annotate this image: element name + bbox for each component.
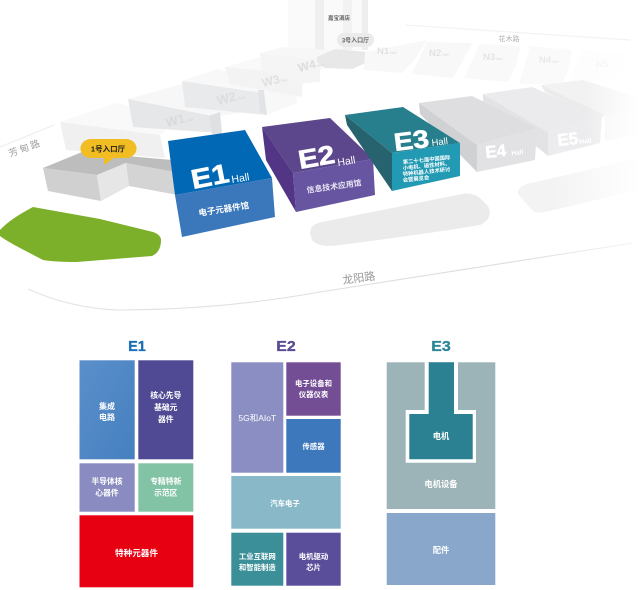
hall E2: E2 xyxy=(296,140,337,174)
hall E4 xyxy=(419,96,537,172)
hall N5 xyxy=(568,50,625,82)
hall N1: N1 Hall xyxy=(377,46,397,57)
E1: 半导体核心器件 xyxy=(80,463,135,512)
hall E3: 特种机器人技术研讨 xyxy=(402,165,451,178)
hall E5: E5Hall xyxy=(556,128,592,150)
hall N1 xyxy=(364,40,427,73)
hall E1: Hall xyxy=(231,171,250,186)
E1: 核心先导基础元器件: 基础元 xyxy=(154,402,178,412)
hotel tower: 嘉宝酒店 xyxy=(328,14,350,22)
E2: 电子设备和仪器仪表: 仪器仪表 xyxy=(299,390,329,399)
E1: 半导体核心器件: 半导体核 xyxy=(91,476,123,486)
E1: 半导体核心器件: 心器件 xyxy=(95,488,119,498)
E1: 专精特新示范区: 专精特新 xyxy=(150,476,182,486)
hall E3: 会暨展览会 xyxy=(402,173,430,184)
E1: 专精特新示范区 xyxy=(138,463,193,512)
E2: 工业互联网和智能制造 xyxy=(231,533,283,586)
hall N5: N5 xyxy=(596,59,609,70)
entrance 1 label: 1号入口厅 xyxy=(91,144,126,154)
hall E1 xyxy=(168,130,275,237)
hall W2: W2Hall xyxy=(215,87,246,108)
hall E3: 第二十七届中国国际 xyxy=(402,153,451,166)
E2: 汽车电子 xyxy=(231,476,341,529)
hall W1: W1Hall xyxy=(164,109,195,130)
road: 花木路 xyxy=(405,25,630,43)
heading E2: E2 xyxy=(276,339,296,355)
E2: 电机驱动芯片: 电机驱动 xyxy=(299,552,329,561)
road: 芳甸路 xyxy=(0,125,54,160)
entrance 1 building xyxy=(43,152,178,201)
hall N2 xyxy=(412,42,473,78)
hall E4: E4 Hall xyxy=(484,139,524,162)
right edge fade xyxy=(585,50,640,260)
hall E1: 电子元器件馆 xyxy=(198,200,250,218)
E2: 工业互联网和智能制造: 工业互联网 xyxy=(239,552,276,561)
E1: 集成电路: 电路 xyxy=(99,412,115,422)
E1: 核心先导基础元器件: 核心先导 xyxy=(150,390,182,400)
E2: 工业互联网和智能制造: 和智能制造 xyxy=(239,563,276,572)
hall W3: W3Hall xyxy=(260,70,289,90)
E1: 核心先导基础元器件 xyxy=(138,360,193,459)
hall E3: E3 xyxy=(392,125,431,157)
treemap E2 xyxy=(231,362,341,586)
hall E2: 信息技术应用馆 xyxy=(306,177,362,195)
road: 龙阳路 xyxy=(28,243,633,310)
E3: 电机 xyxy=(406,362,476,463)
hall N4 xyxy=(519,46,572,84)
E3: 电机设备 xyxy=(387,362,495,509)
hall N4: N4 Hall xyxy=(539,55,559,66)
hotel tower xyxy=(288,0,368,50)
hall W0 xyxy=(60,103,180,158)
E1: 集成电路 xyxy=(80,360,135,459)
E1: 特种元器件 xyxy=(80,515,193,587)
hall E3: 小电机、磁性材料、 xyxy=(402,159,451,172)
entrance 3 label: 3号入口厅 xyxy=(342,38,369,44)
E2: 5G和AIoT xyxy=(231,362,283,473)
pad: front of E1-E3 xyxy=(310,194,490,246)
hall E3: Hall xyxy=(431,136,449,149)
hall N3: N3 Hall xyxy=(483,52,503,63)
E2: 电机驱动芯片: 芯片 xyxy=(306,563,321,572)
E2: 电子设备和仪器仪表 xyxy=(286,362,341,416)
hall E2: Hall xyxy=(337,154,356,169)
hall E3 xyxy=(345,107,460,191)
hall N2: N2 Hall xyxy=(429,48,449,59)
road: 芳甸路: 芳甸路 xyxy=(7,137,43,160)
heading E3: E3 xyxy=(431,339,451,355)
entrance 3 label xyxy=(337,33,374,47)
E2: 5G和AIoT: 5G和AIoT xyxy=(238,413,276,423)
hall E1: E1 xyxy=(189,159,232,195)
treemap E1 xyxy=(80,360,193,587)
hall E6 xyxy=(541,80,640,141)
hall W4 xyxy=(260,47,368,84)
E3: 配件 xyxy=(387,513,495,585)
E2: 电子设备和仪器仪表: 电子设备和 xyxy=(295,379,332,388)
E3: 电机设备: 电机设备 xyxy=(424,479,458,489)
E1: 集成电路: 集成 xyxy=(99,401,115,411)
pad: front of E4-E5 xyxy=(518,158,640,213)
hall E5 xyxy=(483,87,602,156)
E1: 专精特新示范区: 示范区 xyxy=(154,488,178,498)
hall W1 xyxy=(128,84,262,134)
hall W4: W4Hall xyxy=(296,55,325,75)
E3: 配件: 配件 xyxy=(433,545,450,555)
E2: 传感器: 传感器 xyxy=(302,442,325,451)
treemap E3 xyxy=(387,362,495,585)
hall N3 xyxy=(464,44,521,82)
hall E2 xyxy=(262,118,375,212)
road: 花木路: 花木路 xyxy=(498,34,520,43)
E3: 电机: 电机 xyxy=(433,431,450,441)
E2: 汽车电子: 汽车电子 xyxy=(270,499,300,508)
road: 龙阳路: 龙阳路 xyxy=(342,270,376,287)
hall W3 xyxy=(225,57,330,97)
E1: 特种元器件: 特种元器件 xyxy=(115,547,158,558)
E1: 核心先导基础元器件: 器件 xyxy=(158,414,174,424)
heading E1: E1 xyxy=(128,339,146,355)
E2: 传感器 xyxy=(286,419,341,473)
E2: 电机驱动芯片 xyxy=(286,533,341,586)
green area xyxy=(0,207,161,262)
entrance 1 label xyxy=(80,139,137,165)
hall W2 xyxy=(182,69,297,115)
